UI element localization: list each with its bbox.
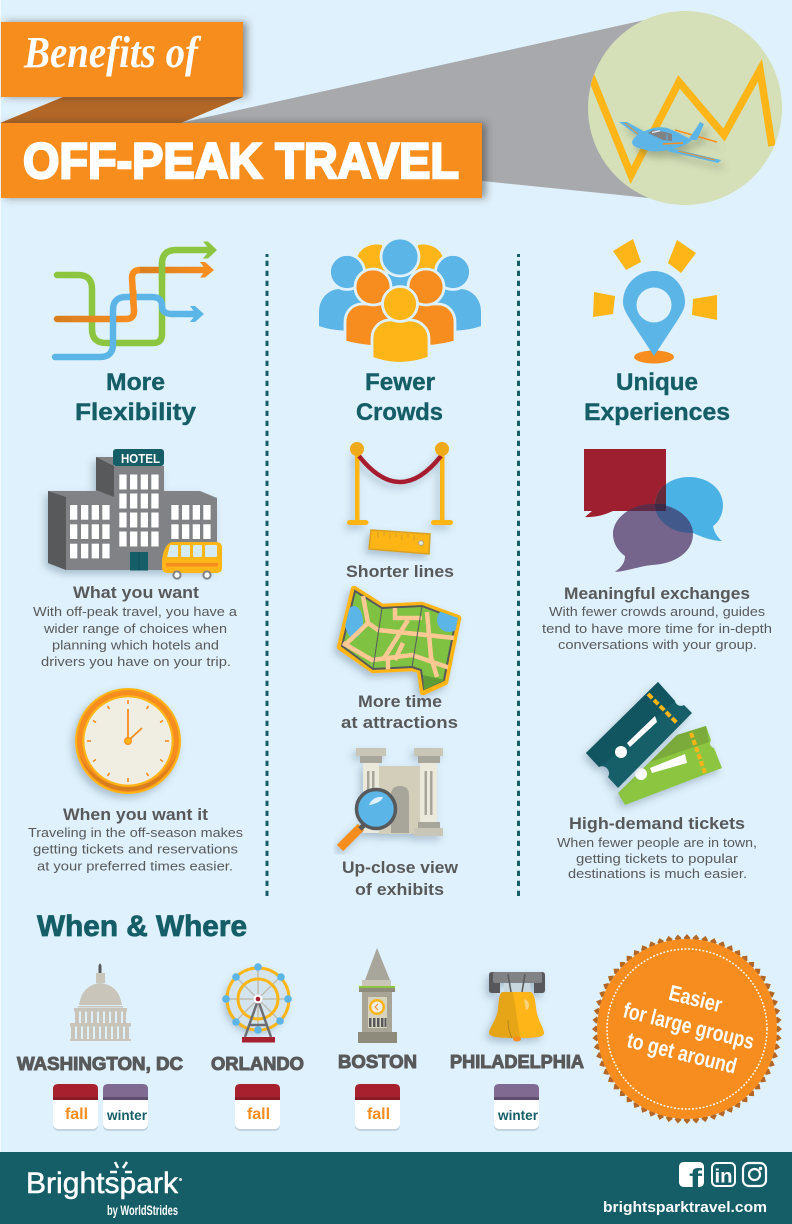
text: what you want: drivers you have on your trip. <box>41 654 231 669</box>
heading ribbon: benefits of: Benefits of <box>23 28 202 77</box>
label: boston: BOSTON <box>338 1051 417 1072</box>
calendar: winter <box>103 1084 148 1131</box>
icon: instagram <box>743 1163 766 1186</box>
label: more time at attractions: More time <box>358 693 442 711</box>
panel: boston <box>338 948 417 1131</box>
heading: unique experiences <box>584 369 730 426</box>
heading ribbon: benefits of <box>1 22 243 97</box>
heading: when and where: When & Where <box>37 910 247 943</box>
icon: magnifying glass <box>340 790 396 848</box>
icon: airplane <box>619 122 721 163</box>
text: meaningful exchanges: With fewer crowds around, guides <box>549 604 766 619</box>
text: what you want: wider range of choices when <box>43 621 227 636</box>
label: up-close view of exhibits: Up-close view <box>342 859 458 877</box>
calendar: winter: winter <box>497 1107 539 1123</box>
callout badge: easier for large groups: Easier <box>666 980 725 1017</box>
website url: brightsparktravel.com <box>603 1199 767 1216</box>
icon: facebook: f <box>689 1163 702 1193</box>
panel: fewer crowds <box>319 238 481 899</box>
text: what you want: With off-peak travel, you have a <box>33 604 238 619</box>
panel: philadelphia <box>450 972 584 1131</box>
heading: unique experiences: Unique <box>616 369 698 396</box>
text: when you want it: When you want it <box>63 806 209 824</box>
text: when you want it: Traveling in the off-season makes <box>28 825 244 840</box>
icon: hotel with bus <box>48 449 222 579</box>
text: high-demand tickets <box>557 815 757 881</box>
icon: speech bubbles <box>584 449 723 572</box>
title ribbon: off-peak travel: OFF-PEAK TRAVEL <box>23 133 459 189</box>
text: when you want it: getting tickets and reservations <box>33 842 239 857</box>
text: what you want <box>33 584 238 669</box>
text: when you want it <box>28 806 244 873</box>
text: high-demand tickets: High-demand tickets <box>569 815 745 833</box>
panel: orlando <box>211 963 304 1131</box>
label: shorter lines: Shorter lines <box>346 563 454 581</box>
heading: more flexibility <box>75 369 197 426</box>
icon: liberty bell <box>489 972 545 1042</box>
icon: tickets <box>586 682 722 805</box>
text: meaningful exchanges: tend to have more time for in-depth <box>542 621 772 636</box>
text: what you want: planning which hotels and <box>52 638 219 652</box>
text: high-demand tickets: When fewer people are in town, <box>557 835 757 850</box>
icon: folded map <box>340 589 461 692</box>
text: what you want: What you want <box>73 584 200 602</box>
label: more time at attractions <box>341 693 458 732</box>
heading: unique experiences: Experiences <box>584 399 730 426</box>
ribbon fold <box>0 97 243 123</box>
calendar: winter: winter <box>106 1107 148 1123</box>
calendar: fall: fall <box>247 1106 270 1123</box>
calendar: fall: fall <box>367 1106 390 1123</box>
icon: rope barrier and ruler <box>347 442 453 554</box>
icon: ferris wheel <box>222 963 292 1042</box>
logo: brightspark by worldstrides: Brightspark <box>26 1167 179 1200</box>
callout badge: easier for large groups <box>574 916 792 1142</box>
icon: linkedin: in <box>714 1166 732 1188</box>
text: meaningful exchanges <box>542 585 772 652</box>
calendar: fall: fall <box>65 1106 88 1123</box>
telescope beam <box>180 19 649 198</box>
icon: map pin with rays <box>593 239 717 364</box>
icon: bus <box>162 542 222 579</box>
heading: fewer crowds: Crowds <box>356 399 443 426</box>
icon: clock tower <box>358 948 397 1043</box>
label: orlando: ORLANDO <box>211 1053 304 1074</box>
social icons <box>679 1162 766 1193</box>
label: up-close view of exhibits <box>342 859 458 899</box>
icon: capitol building <box>70 964 131 1041</box>
icon: hotel with bus: HOTEL <box>121 451 160 466</box>
calendar: fall <box>53 1084 98 1131</box>
icon: museum with magnifying glass <box>340 748 443 848</box>
label: washington dc: WASHINGTON, DC <box>17 1053 183 1074</box>
heading: more flexibility: Flexibility <box>75 399 197 426</box>
heading: more flexibility: More <box>106 369 165 396</box>
panel: washington dc <box>17 964 183 1131</box>
text: meaningful exchanges: Meaningful exchanges <box>564 585 750 603</box>
footer <box>0 1152 792 1224</box>
callout badge: easier for large groups: to get around <box>625 1027 739 1079</box>
logo: brightspark by worldstrides <box>26 1162 182 1218</box>
heading: fewer crowds <box>356 369 443 426</box>
callout badge: easier for large groups: for large groups <box>621 998 757 1054</box>
icon: ruler <box>369 530 430 554</box>
icon: crossing arrows <box>55 242 217 357</box>
circle with mountain line and plane <box>588 11 782 205</box>
text: high-demand tickets: destinations is much easier. <box>568 866 747 881</box>
icon: crowd of people <box>319 238 481 363</box>
text: high-demand tickets: getting tickets to popular <box>576 851 739 866</box>
logo: brightspark by worldstrides: by WorldStrides <box>107 1203 178 1218</box>
label: philadelphia: PHILADELPHIA <box>450 1051 584 1072</box>
header banner <box>0 11 782 205</box>
calendar: winter <box>494 1084 539 1131</box>
heading: fewer crowds: Fewer <box>365 369 435 396</box>
text: when you want it: at your preferred times easier. <box>37 858 233 873</box>
text: meaningful exchanges: conversations with your group. <box>558 637 757 652</box>
label: up-close view of exhibits: of exhibits <box>355 881 444 899</box>
icon: clock <box>75 688 181 794</box>
label: more time at attractions: at attractions <box>341 714 458 732</box>
calendar: fall <box>355 1084 400 1131</box>
calendar: fall <box>235 1084 280 1131</box>
panel: more flexibility <box>28 242 244 873</box>
panel: unique experiences <box>542 239 772 881</box>
